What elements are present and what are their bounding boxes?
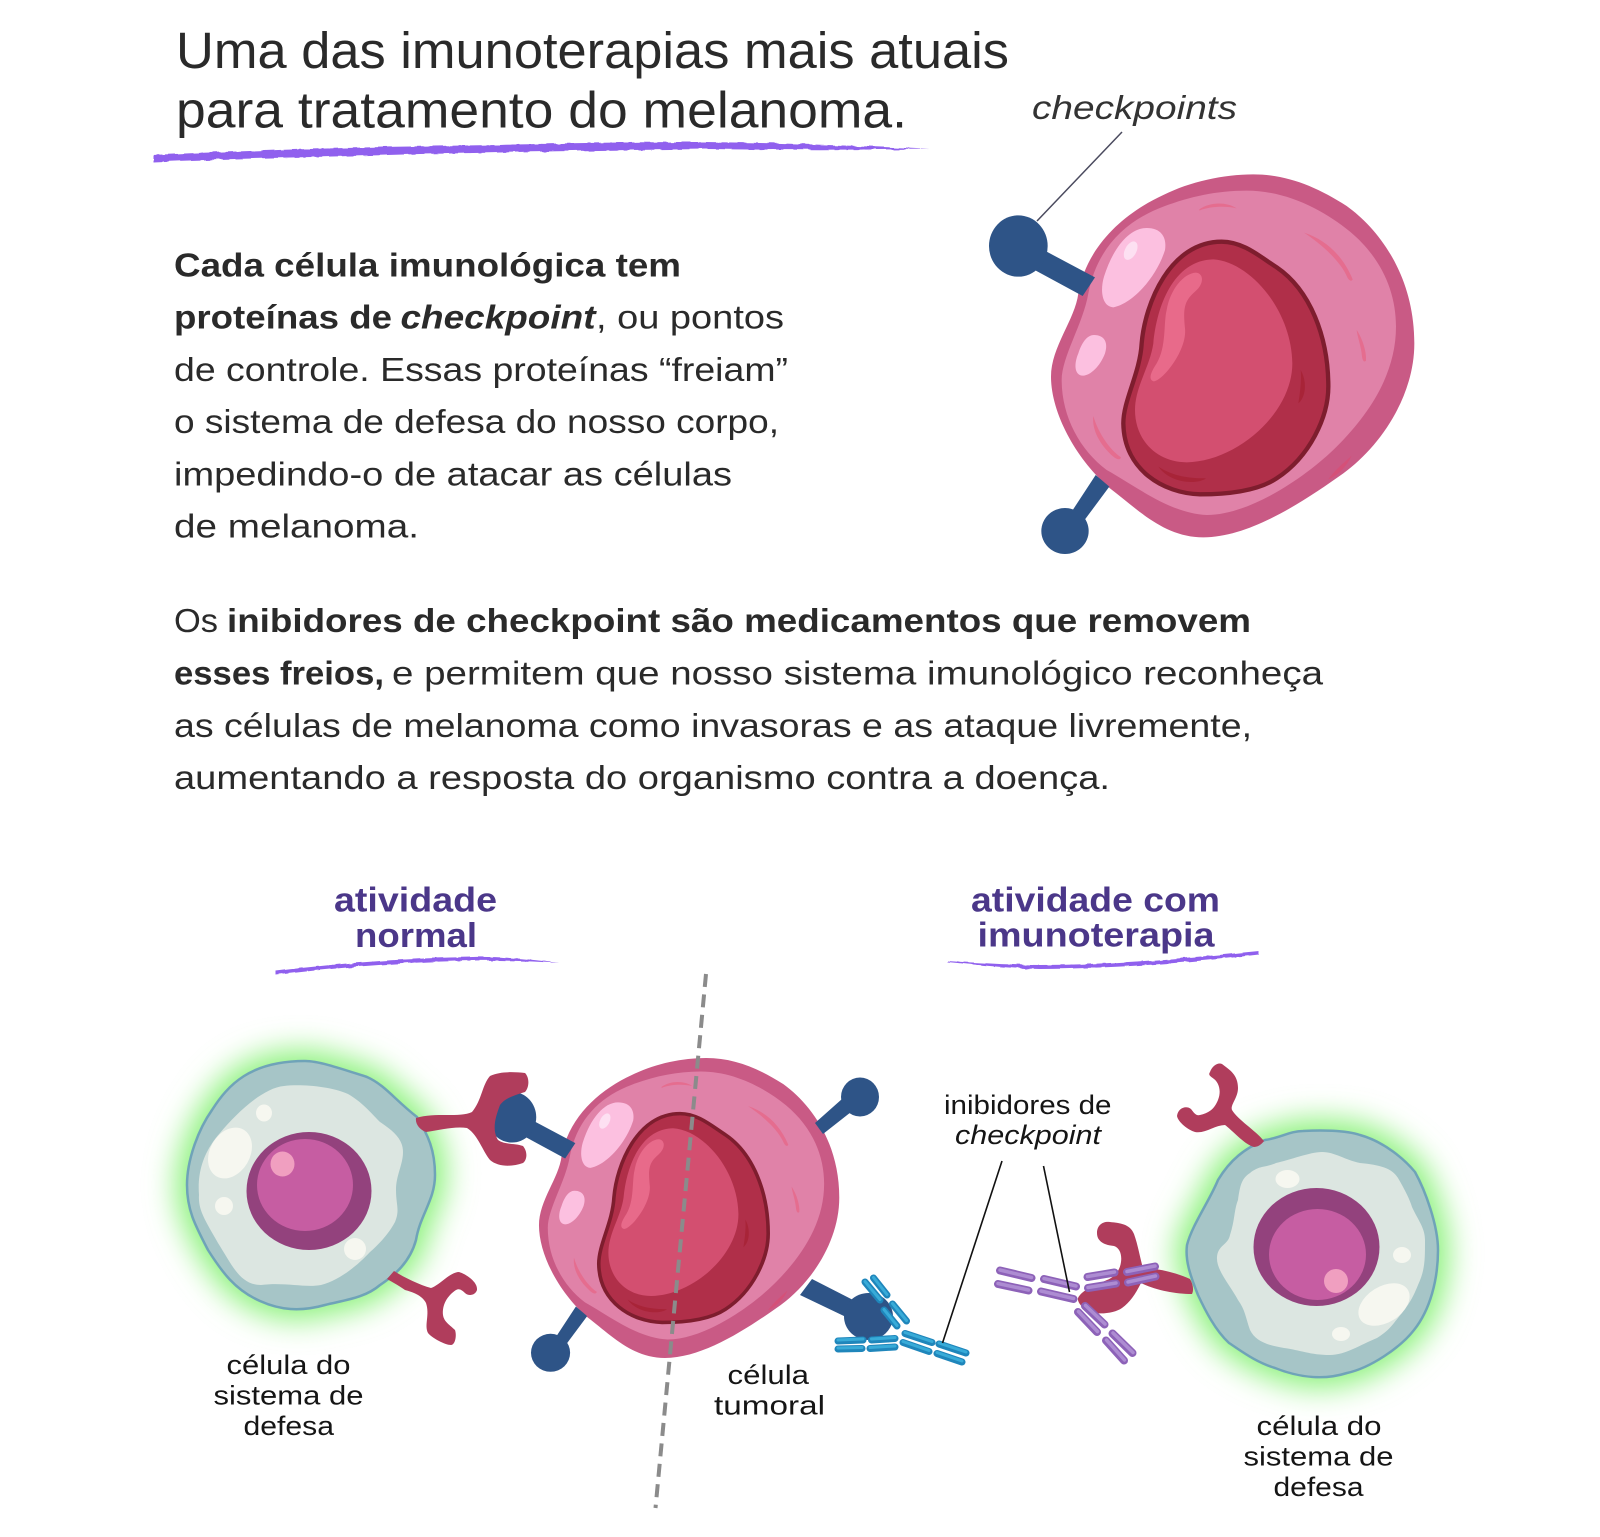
text block: checkpoint proteins: o sistema de defesa do nosso corpo, <box>174 403 779 440</box>
label: checkpoints: checkpoints <box>1032 89 1237 126</box>
text block: checkpoint inhibitors: Os <box>174 602 218 639</box>
illustration: large tumor cell <box>989 174 1414 554</box>
receptor: top right <box>1177 1063 1264 1147</box>
text block: checkpoint proteins: impedindo-o de atacar as células <box>174 456 732 492</box>
label: célula do sistema de defesa (left): defesa <box>244 1411 334 1441</box>
heading: atividade normal <box>334 882 497 955</box>
text block: checkpoint proteins: Cada célula imunológica tem <box>174 246 681 284</box>
immune cell: normal activity <box>187 1061 435 1309</box>
text block: checkpoint inhibitors: aumentando a resposta do organismo contra a doença. <box>174 759 1110 796</box>
blue checkpoint inhibitor antibody <box>838 1278 966 1362</box>
text block: checkpoint proteins: de controle. Essas proteínas “freiam” <box>174 351 788 388</box>
label: inibidores de checkpoint: inibidores de <box>944 1090 1112 1120</box>
label: célula do sistema de defesa (left) <box>214 1350 364 1441</box>
label: célula do sistema de defesa (right): defesa <box>1274 1472 1364 1502</box>
illustration: tumor cell <box>488 1058 839 1372</box>
title: Uma das imunoterapias mais atuais <box>176 22 1009 79</box>
leader lines: checkpoint inhibitors <box>942 1161 1070 1343</box>
text block: checkpoint proteins: checkpoint <box>400 298 598 336</box>
label: célula do sistema de defesa (right): sistema de <box>1244 1442 1394 1472</box>
receptor: blocked by inhibitor <box>1078 1222 1193 1313</box>
label: célula do sistema de defesa (left): célula do <box>226 1350 350 1380</box>
text block: checkpoint inhibitors: inibidores de checkpoint são medicamentos que removem <box>227 602 1251 639</box>
text block: checkpoint inhibitors: esses freios, <box>174 654 384 692</box>
purple checkpoint inhibitor antibody <box>998 1266 1156 1360</box>
checkpoint protein: upper right <box>815 1078 879 1134</box>
leader line: checkpoints <box>1037 132 1122 221</box>
heading: atividade com imunoterapia: imunoterapia <box>978 916 1216 954</box>
text block: checkpoint proteins: , ou pontos <box>596 298 784 336</box>
heading: atividade com imunoterapia: atividade com <box>971 882 1220 920</box>
checkpoint protein: lower right <box>800 1279 893 1340</box>
underline: atividade normal <box>276 957 560 975</box>
label: inibidores de checkpoint <box>944 1090 1112 1150</box>
text block: checkpoint proteins: de melanoma. <box>174 508 419 544</box>
heading: atividade com imunoterapia <box>971 882 1220 954</box>
underline: atividade com imunoterapia <box>947 951 1259 969</box>
text block: checkpoint inhibitors <box>174 602 1324 796</box>
label: célula do sistema de defesa (right) <box>1244 1411 1394 1502</box>
text block: checkpoint inhibitors: e permitem que nosso sistema imunológico reconheça <box>392 654 1324 692</box>
heading: atividade normal: atividade <box>334 882 497 920</box>
title <box>176 22 1009 138</box>
heading: atividade normal: normal <box>355 917 477 955</box>
text block: checkpoint proteins: proteínas de <box>174 298 392 336</box>
label: célula do sistema de defesa (left): sistema de <box>214 1380 364 1410</box>
receptor: upper left <box>416 1072 528 1166</box>
dashed divider line <box>656 974 706 1508</box>
immune cell: with immunotherapy <box>1187 1130 1438 1377</box>
label: inibidores de checkpoint: checkpoint <box>955 1120 1103 1150</box>
title: para tratamento do melanoma. <box>176 82 907 138</box>
label: célula tumoral: célula <box>728 1360 809 1390</box>
text block: checkpoint proteins <box>174 246 788 544</box>
text block: checkpoint inhibitors: as células de melanoma como invasoras e as ataque livremente, <box>174 707 1252 744</box>
label: célula tumoral <box>714 1360 825 1420</box>
label: célula do sistema de defesa (right): célula do <box>1256 1411 1382 1441</box>
label: célula tumoral: tumoral <box>714 1390 825 1420</box>
receptor: lower left <box>387 1271 477 1345</box>
title underline stroke <box>153 142 930 162</box>
